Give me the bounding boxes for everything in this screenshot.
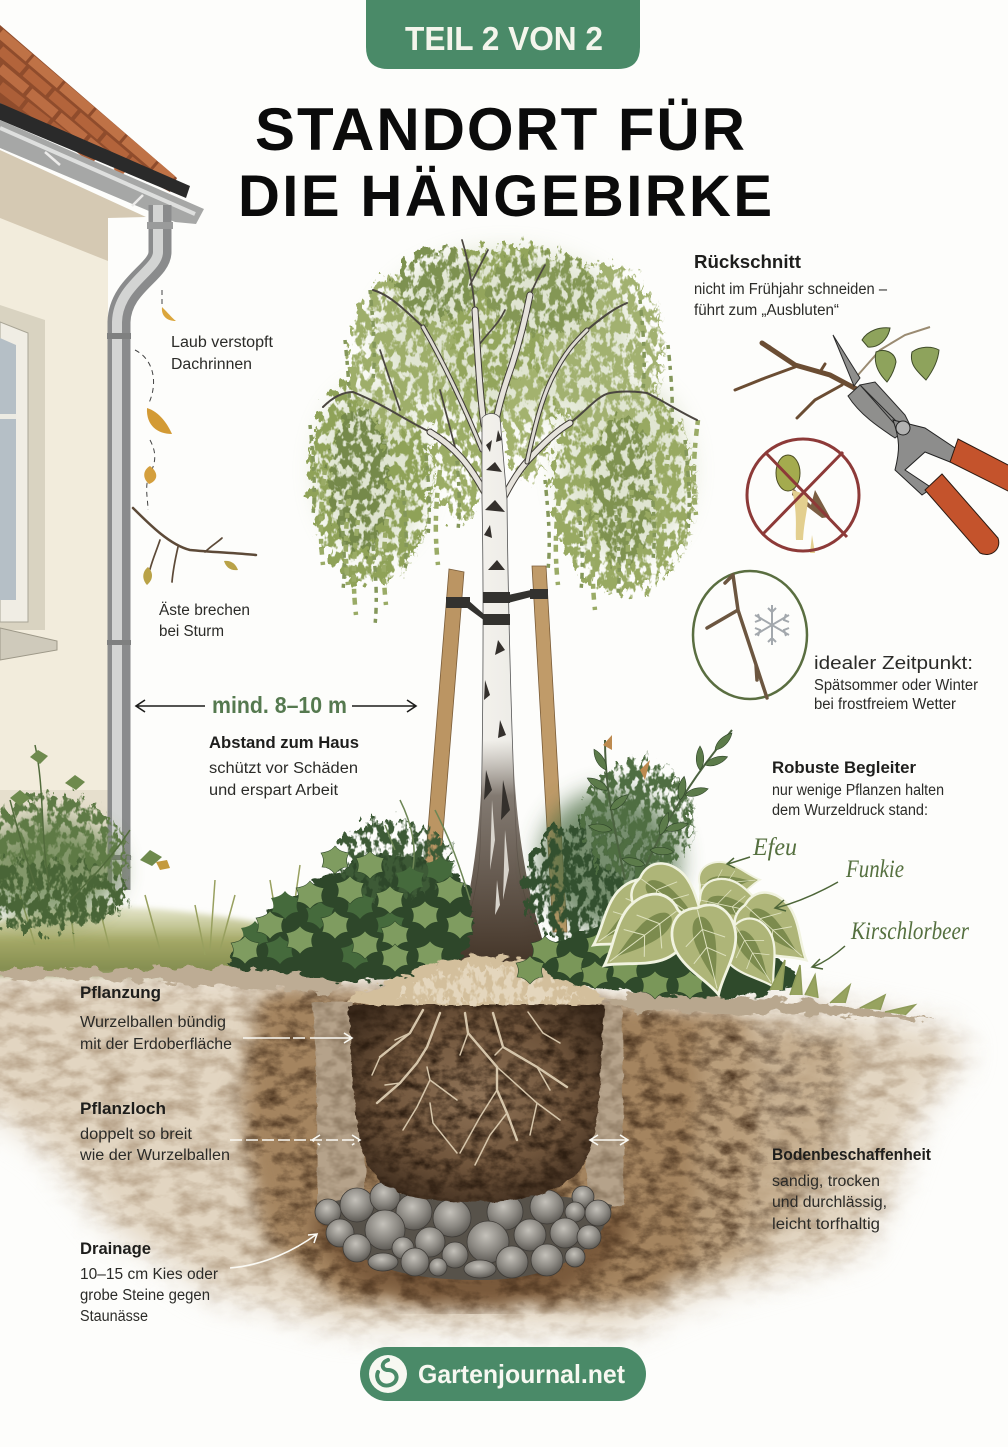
prohibition circle [747,439,859,551]
text: Rückschnitt: nicht im Frühjahr schneiden – [694,281,887,298]
logo icon [369,1355,407,1393]
soffit [0,150,146,261]
mulch [345,955,610,1012]
label: Efeu: Efeu [752,834,797,861]
label: Efeu [727,834,797,868]
banner text: TEIL 2 VON 2 [405,20,603,57]
downpipe [107,205,173,890]
hanging leaf strands [310,290,698,625]
root ball [348,1005,605,1202]
cut branch [735,343,862,418]
text: Robuste Begleiter: nur wenige Pflanzen halten [772,782,944,799]
gravel drainage [315,1182,612,1280]
text: Drainage: 10–15 cm Kies oder [80,1266,218,1283]
cherry laurel stem [585,730,735,880]
left hole wall [312,1002,366,1215]
hosta leaves [576,854,826,1002]
twig [707,575,767,698]
falling leaf 3 [144,466,156,484]
text: Rückschnitt: Rückschnitt [694,252,801,272]
text: Pflanzloch: doppelt so breit [80,1126,193,1143]
lower ivy [516,931,704,999]
mulch highlights [400,966,585,1003]
canopy soft underlay [317,250,690,560]
logo text: Gartenjournal.net [418,1359,625,1389]
label: Funkie [775,856,904,911]
black fascia [0,103,190,198]
falling leaf 1 [162,307,176,321]
text: idealer Zeitpunkt: Spätsommer oder Winter [814,677,978,694]
right ground edge [605,992,940,1020]
birch tree [310,240,698,962]
text: Abstand zum Haus: Abstand zum Haus [209,734,359,752]
main limbs outline [430,295,570,497]
lower bark [452,740,550,962]
snowflake [755,605,789,645]
right hole wall [585,1005,624,1210]
distance value: mind. 8–10 m [212,692,347,718]
grass right [770,960,915,1015]
text: Pflanzloch: wie der Wurzelballen [79,1147,230,1164]
branch leaf [143,561,238,585]
text: Abstand zum Haus: und erspart Arbeit [209,782,339,799]
text: idealer Zeitpunkt: bei frostfreiem Wetter [814,696,956,713]
shrub underlay [540,790,680,930]
arrow: hole width left [230,1135,360,1145]
title: DIE HÄNGEBIRKE [238,164,772,229]
bark highlights [490,800,509,915]
text: Laub verstopft: Dachrinnen [171,356,252,373]
winter twig circle [693,571,807,699]
ground cover: ivy left [225,800,474,982]
text: Drainage: Staunässe [80,1308,148,1325]
label: Kirschlorbeer: Kirschlorbeer [850,918,969,945]
text: Pflanzloch [79,1100,230,1164]
title: STANDORT FÜR [255,96,745,163]
text: Pflanzung [80,984,232,1053]
house [0,25,204,890]
label: Funkie: Funkie [845,856,904,883]
stake left [424,569,464,882]
title [238,96,772,229]
stake right [532,566,567,932]
arrow: hole width right [590,1135,628,1145]
broken branch [133,508,256,582]
text: idealer Zeitpunkt [814,653,978,713]
text: Drainage: grobe Steine gegen [80,1287,210,1304]
text: Pflanzloch: Pflanzloch [80,1100,166,1118]
text: Robuste Begleiter: dem Wurzeldruck stand: [772,802,928,819]
bark marks [484,430,510,820]
arrow: drainage [230,1234,317,1268]
window [0,305,57,660]
text: Äste brechen: Äste brechen [159,602,250,619]
left ground edge [0,968,345,992]
pruner blades [833,335,910,438]
roots [372,1010,567,1165]
no-cut sign [747,439,859,553]
handle lower [925,474,999,555]
secondary limbs white bark [423,327,587,462]
planting hole [312,1002,624,1280]
main limbs white bark [430,295,570,497]
twig with leaves [858,327,930,375]
grass strip [0,865,300,975]
text: Äste brechen: bei Sturm [159,623,224,640]
arrow: ball flush [243,1033,352,1043]
wall base shading [0,790,108,880]
text: idealer Zeitpunkt: idealer Zeitpunkt: [814,653,973,673]
secondary limbs outline [423,327,587,462]
text: Pflanzung: Wurzelballen bündig [80,1014,226,1031]
canopy foliage [310,245,697,595]
annotation arrows on soil [230,1033,628,1268]
pruning illustration [735,327,1008,555]
tree ties [446,589,548,625]
handle upper [950,439,1008,492]
text: Bodenbeschaffenheit: sandig, trocken [772,1173,880,1190]
left shrub at house [0,745,170,930]
text: Drainage [80,1240,218,1325]
shrub background [525,820,665,950]
text: Robuste Begleiter: Robuste Begleiter [772,759,917,777]
text: Rückschnitt [694,252,887,319]
pruner joint [893,420,958,495]
falling leaf 2 [147,408,172,434]
gutter [0,120,204,224]
text: Robuste Begleiter [772,759,944,819]
companion plants: right [516,730,915,1015]
label: Kirschlorbeer [812,918,969,969]
fine branches [323,240,697,447]
banner [366,0,640,69]
text: Pflanzung: Pflanzung [80,984,161,1002]
soil cross-section [0,968,965,1330]
mound of mulch over root ball [0,955,940,1020]
trunk [450,414,552,962]
text: Bodenbeschaffenheit: Bodenbeschaffenheit [772,1146,931,1164]
house wall [0,170,130,890]
roof tiles [0,25,177,192]
text: Laub verstopft: Laub verstopft [171,334,274,351]
text: Abstand zum Haus: schützt vor Schäden [209,760,358,777]
text: Rückschnitt: führt zum „Ausbluten“ [694,302,839,319]
text: Bodenbeschaffenheit: und durchlässig, [772,1194,887,1211]
falling leaves and broken branch [133,290,256,585]
distance arrow [136,692,416,718]
footer pill [360,1347,646,1401]
text: Pflanzung: mit der Erdoberfläche [80,1036,232,1053]
text: Abstand zum Haus [209,734,359,799]
text: Drainage: Drainage [80,1240,151,1258]
leaf trail [135,290,162,510]
oozing bud [776,455,830,553]
text: Bodenbeschaffenheit: leicht torfhaltig [772,1216,880,1233]
birch leaves [862,328,939,382]
text: Bodenbeschaffenheit [772,1146,931,1233]
